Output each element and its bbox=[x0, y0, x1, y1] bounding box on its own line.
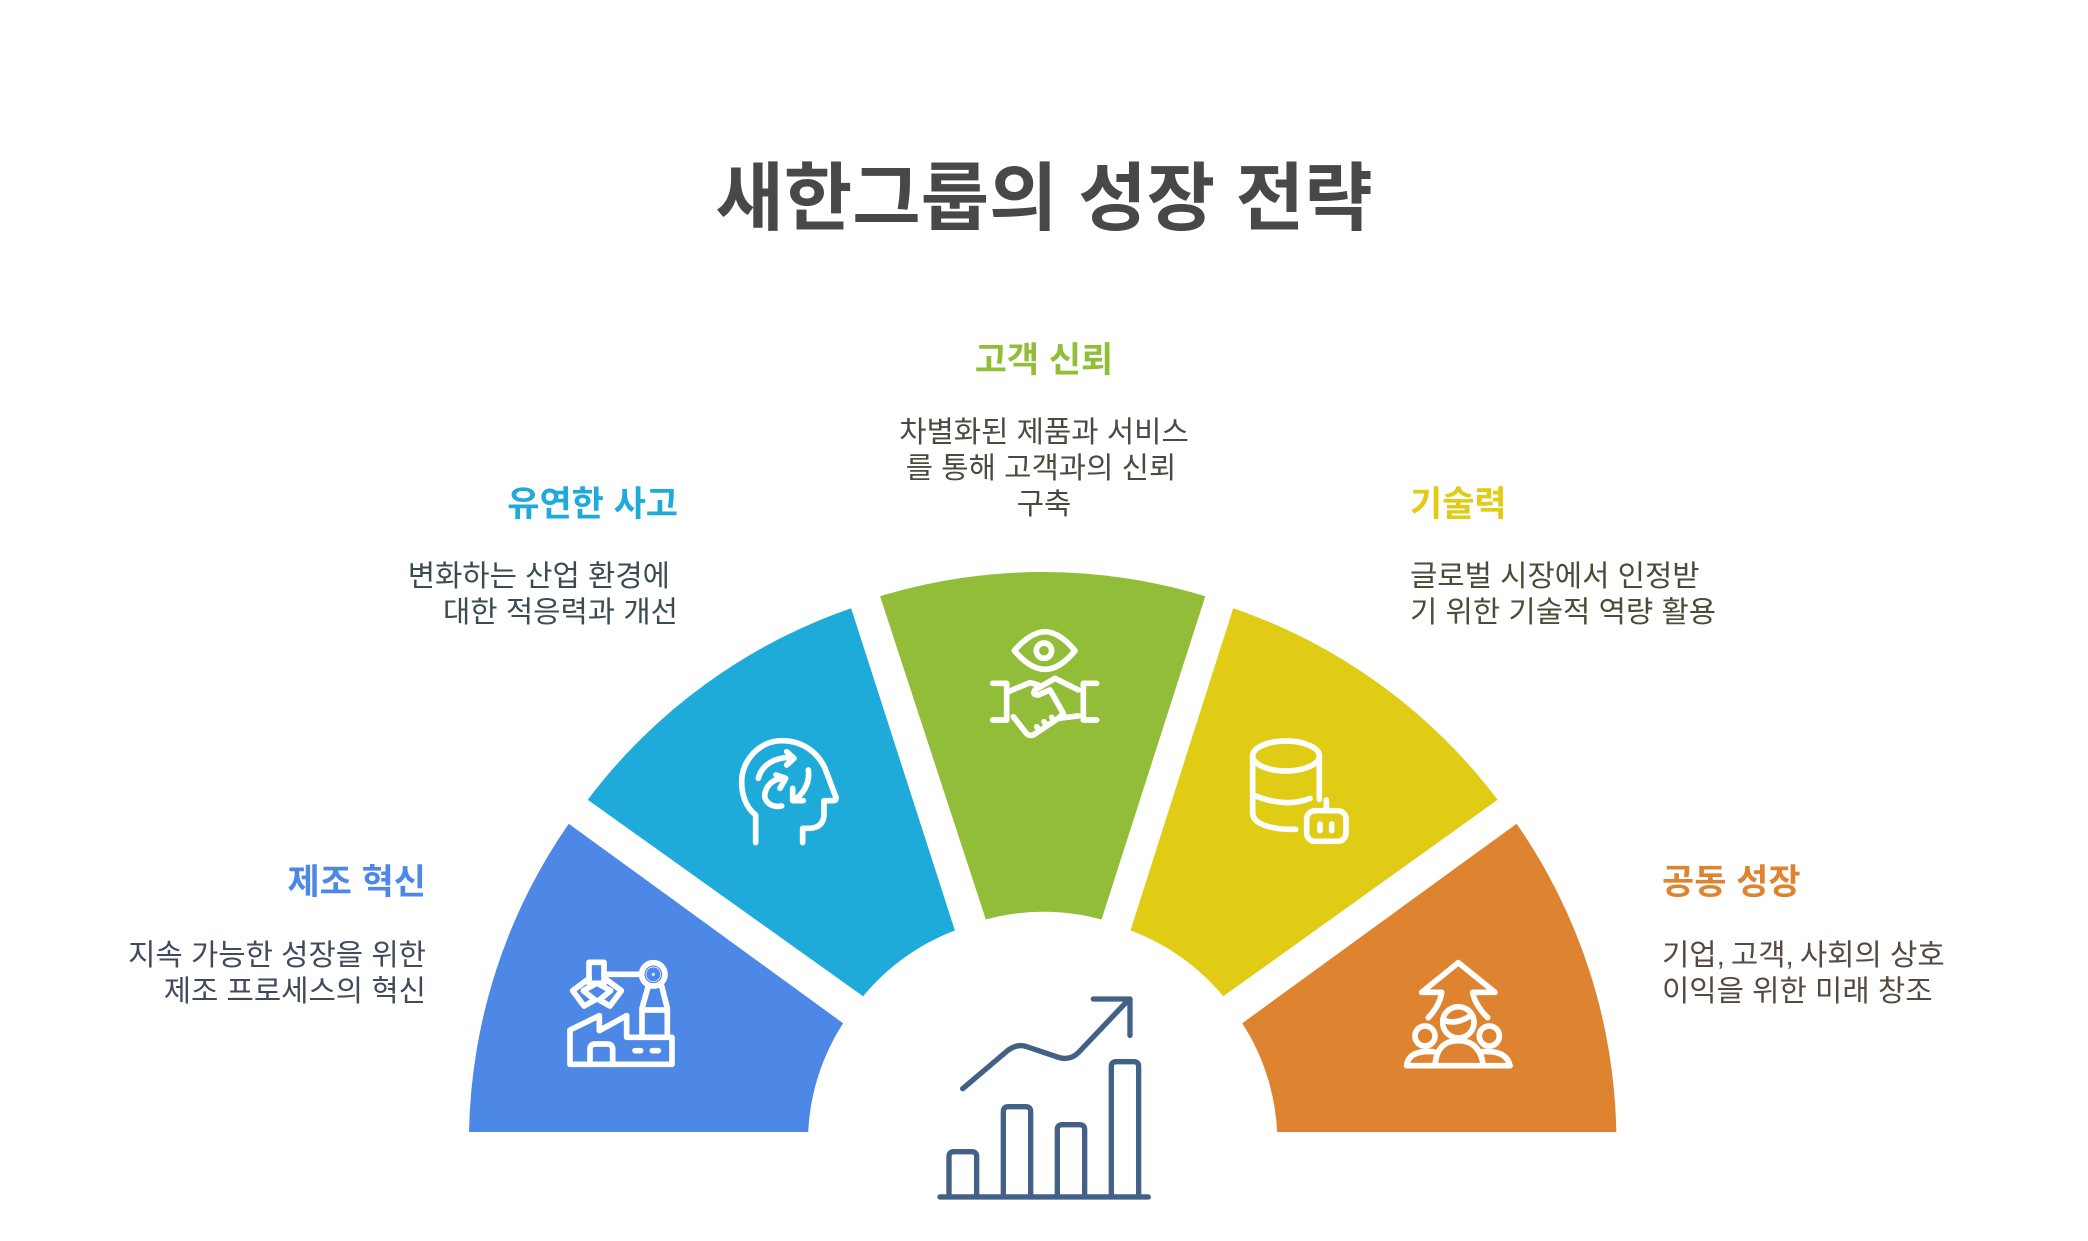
text block: 제조 혁신: 제조 혁신 bbox=[287, 863, 426, 902]
text block: 공동 성장: 공동 성장 bbox=[1662, 863, 1801, 902]
text block: 유연한 사고: 유연한 사고 bbox=[507, 485, 678, 524]
text block: 유연한 사고 bbox=[408, 485, 678, 629]
text block: 고객 신뢰: 구축 bbox=[1017, 488, 1071, 521]
text block: 제조 혁신 bbox=[128, 863, 426, 1008]
text block: 유연한 사고: 변화하는 산업 환경에 bbox=[408, 560, 670, 593]
icon: eye and handshake bbox=[993, 632, 1097, 735]
text block: 공동 성장 bbox=[1662, 863, 1945, 1008]
text block: 제조 혁신: 지속 가능한 성장을 위한 bbox=[128, 939, 426, 972]
text block: 공동 성장: 이익을 위한 미래 창조 bbox=[1662, 975, 1933, 1008]
panel: 제조 혁신 wedge bbox=[469, 824, 843, 1132]
text block: 고객 신뢰: 를 통해 고객과의 신뢰 bbox=[906, 452, 1176, 485]
title: 새한그룹의 성장 전략 bbox=[715, 157, 1373, 240]
text block: 기술력: 글로벌 시장에서 인정받 bbox=[1410, 560, 1700, 593]
panel: 공동 성장 wedge bbox=[1242, 824, 1616, 1132]
icon: people and up arrow bbox=[1407, 963, 1510, 1066]
text block: 기술력: 기 위한 기술적 역량 활용 bbox=[1410, 596, 1716, 629]
icon: factory and robot arm bbox=[570, 962, 672, 1064]
text block: 제조 혁신: 제조 프로세스의 혁신 bbox=[164, 975, 426, 1008]
icon: head with arrows bbox=[742, 741, 836, 843]
text block: 고객 신뢰: 고객 신뢰 bbox=[975, 341, 1113, 380]
icon: database and robot bbox=[1253, 741, 1346, 841]
text block: 고객 신뢰: 차별화된 제품과 서비스 bbox=[899, 416, 1189, 449]
text block: 유연한 사고: 대한 적응력과 개선 bbox=[443, 596, 678, 629]
text block: 공동 성장: 기업, 고객, 사회의 상호 bbox=[1662, 939, 1945, 972]
text block: 기술력 bbox=[1410, 485, 1716, 629]
text block: 고객 신뢰 bbox=[899, 341, 1189, 521]
text block: 기술력: 기술력 bbox=[1410, 485, 1507, 524]
panel: 유연한 사고 wedge bbox=[588, 608, 955, 996]
icon: growth bar chart bbox=[940, 999, 1148, 1197]
panel: 고객 신뢰 wedge bbox=[880, 572, 1205, 919]
panel: 기술력 wedge bbox=[1130, 608, 1498, 996]
